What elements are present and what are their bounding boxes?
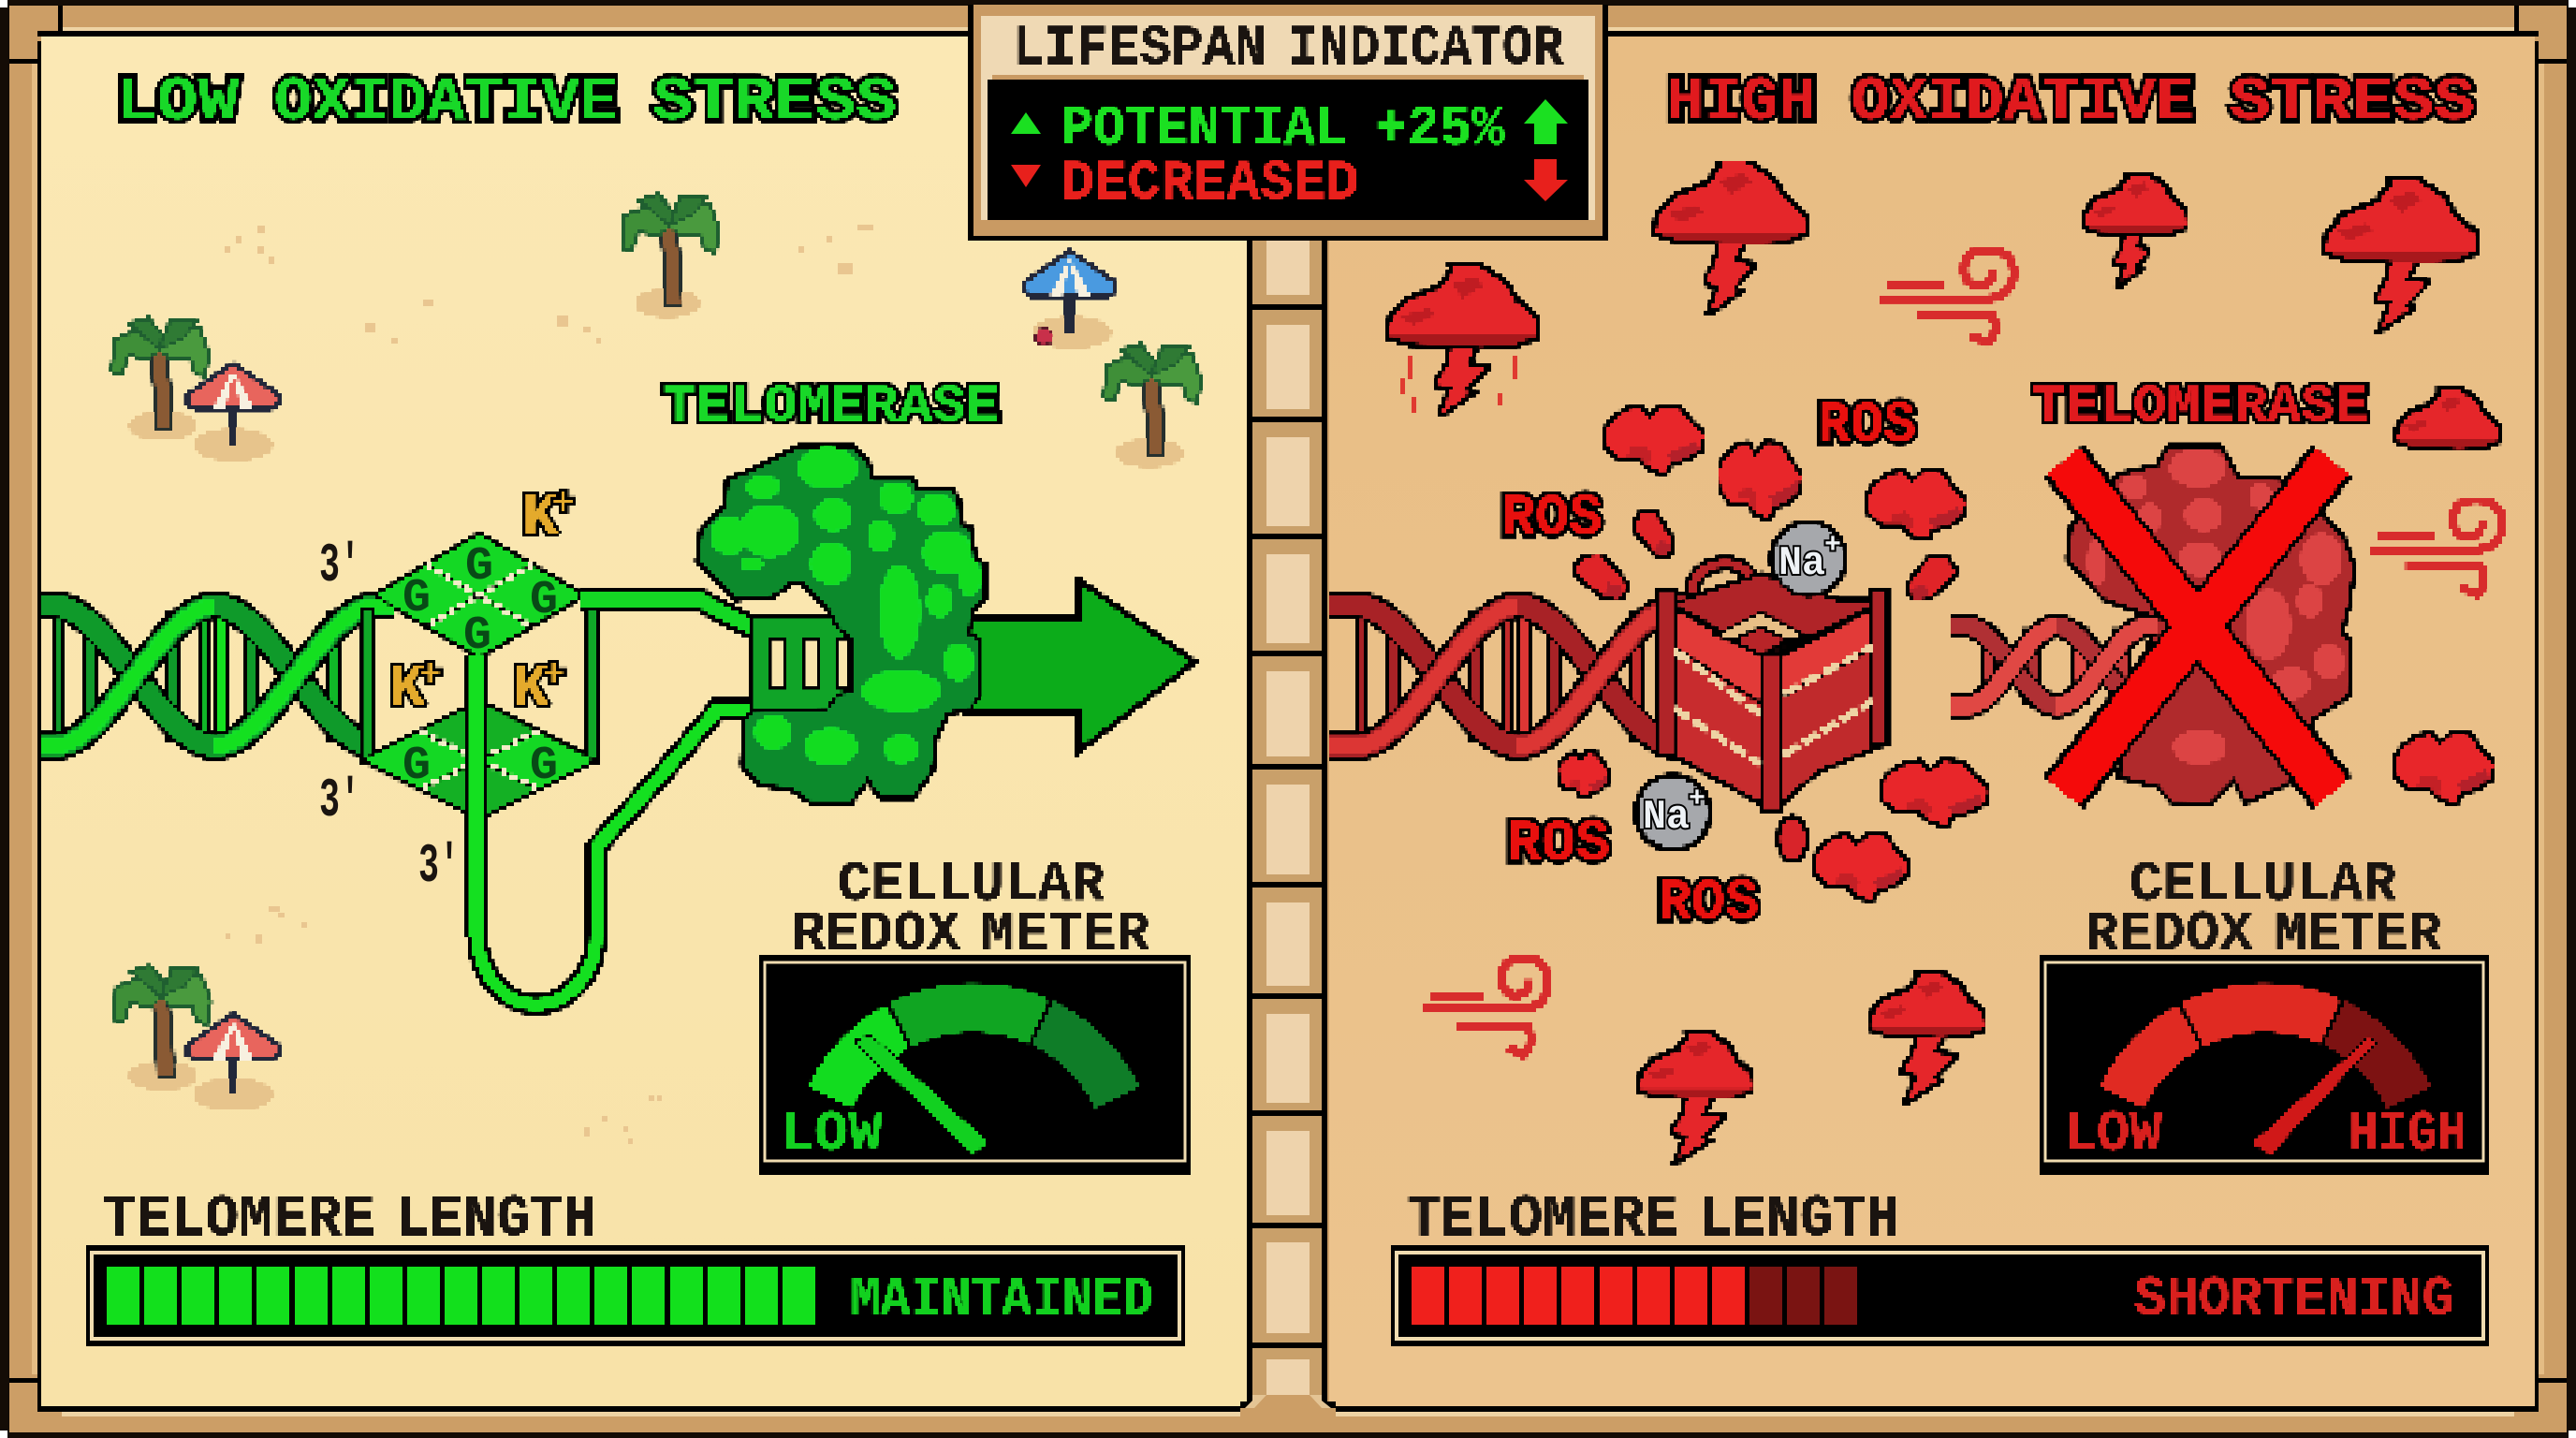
- heading: lifespan indicator: [1013, 18, 1563, 81]
- heading: lifespan indicator: INDICATOR: [1288, 18, 1563, 81]
- title: low oxidative stress: OXIDATIVE: [274, 67, 618, 138]
- potassium ions: K: [513, 656, 549, 724]
- gauge: high redox: LOW: [2064, 1101, 2163, 1167]
- ros labels: [1501, 392, 1916, 936]
- potassium ions: +: [552, 484, 574, 524]
- quadruplex connectors: [363, 609, 598, 763]
- red x: telomerase blocked: [2064, 462, 2332, 792]
- ros labels: ROS: [1501, 485, 1603, 551]
- gauge: high redox: [2040, 955, 2489, 1175]
- telomere length bar: maintained: [86, 1245, 1185, 1346]
- g-quadruplex top tetrad: [374, 534, 584, 657]
- telomerase inactive: [2068, 447, 2354, 803]
- cellular redox meter heading: CELLULAR: [838, 854, 1105, 917]
- title: high oxidative stress: OXIDATIVE: [1852, 67, 2194, 138]
- status: potential +25%: [1011, 98, 1568, 162]
- icon: storm cloud 6: [1867, 971, 1986, 1104]
- icon: small cloud: [2394, 387, 2500, 449]
- status: potential +25%: +25%: [1375, 98, 1505, 162]
- pixel scene: high stress: [1331, 160, 2502, 1164]
- telomere length bar: shortening: [1391, 1245, 2489, 1346]
- icon: wind 2: [2370, 500, 2502, 594]
- gauge: low redox: [759, 955, 1191, 1175]
- ros particles: [1558, 405, 2496, 902]
- title: low oxidative stress: [116, 67, 897, 138]
- cellular redox meter heading: [2085, 854, 2441, 967]
- title: low oxidative stress: STRESS: [652, 67, 897, 138]
- telomere length bar: shortening: SHORTENING: [2134, 1269, 2454, 1332]
- g bases: G: [402, 740, 431, 793]
- icon: storm cloud 2: [2082, 172, 2188, 288]
- title: high oxidative stress: HIGH: [1667, 67, 1816, 138]
- sodium ion bottom: [1636, 776, 1709, 849]
- panel: low oxidative stress: [28, 37, 1247, 1406]
- ros labels: ROS: [1818, 392, 1916, 459]
- potassium ions: K: [389, 656, 425, 724]
- sodium labels: +: [1689, 784, 1705, 815]
- fragmented dna: [1953, 626, 2157, 706]
- lifespan indicator panel: [968, 5, 1608, 241]
- cellular redox meter heading: METER: [981, 903, 1149, 967]
- 3 prime labels: 3': [319, 536, 360, 597]
- ros labels: ROS: [1658, 870, 1759, 936]
- cellular redox meter heading: REDOX: [792, 903, 960, 967]
- icon: palm tree bottom: [114, 966, 210, 1090]
- potassium ions: [389, 484, 574, 724]
- g bases: G: [530, 740, 558, 793]
- icon: storm cloud 3: [2322, 178, 2479, 332]
- icon: wind 1: [1880, 250, 2013, 343]
- status: potential +25%: POTENTIAL: [1061, 98, 1347, 162]
- icon: storm cloud 4 with rain: [1385, 264, 1540, 418]
- cellular redox meter heading: METER: [2274, 903, 2441, 967]
- g bases: [402, 540, 558, 793]
- telomere length bar: maintained: MAINTAINED: [850, 1269, 1153, 1332]
- gauge: high redox: HIGH: [2349, 1101, 2466, 1167]
- icon: palm tree top: [622, 195, 719, 317]
- gauge: low redox: LOW: [780, 1101, 884, 1167]
- icon: red umbrella lower: [188, 1015, 278, 1110]
- ros labels: ROS: [1507, 811, 1610, 877]
- sodium labels: +: [1824, 530, 1841, 562]
- label: telomerase: TELOMERASE: [2032, 376, 2368, 436]
- potassium ions: K: [522, 485, 558, 552]
- 3 prime labels: 3': [319, 771, 360, 832]
- arrow: telomere extension: [964, 580, 1193, 751]
- g bases: G: [465, 540, 493, 594]
- telomerase enzyme: [697, 447, 985, 802]
- center divider column: [1240, 234, 1336, 1417]
- panel: high oxidative stress: [1329, 37, 2535, 1406]
- title: low oxidative stress: LOW: [116, 67, 239, 138]
- label: telomerase: TELOMERASE: [663, 376, 1000, 436]
- sodium labels: Na: [1643, 794, 1690, 841]
- status: decreased: DECREASED: [1061, 153, 1359, 216]
- label: telomere length: [103, 1186, 597, 1253]
- pixel scene: low stress: [28, 195, 1200, 1110]
- sand specks: [225, 225, 873, 1144]
- icon: red umbrella: [188, 364, 278, 461]
- icon: blue umbrella with beach ball: [1025, 252, 1115, 348]
- title: high oxidative stress: [1667, 67, 2475, 138]
- g bases: G: [463, 609, 491, 663]
- label: telomere length: TELOMERE: [103, 1186, 375, 1253]
- icon: storm cloud 1: [1653, 160, 1808, 316]
- heading: lifespan indicator: LIFESPAN: [1013, 18, 1266, 81]
- 3 prime labels: [319, 536, 460, 898]
- dna rung block entering telomerase: [753, 618, 854, 710]
- sodium labels: [1643, 530, 1841, 841]
- icon: storm cloud 5: [1637, 1031, 1754, 1164]
- label: telomere length: [1407, 1186, 1900, 1253]
- cellular redox meter heading: REDOX: [2085, 903, 2253, 967]
- dna double helix damaged: [1331, 606, 1696, 746]
- dna double helix: [28, 606, 393, 746]
- title: high oxidative stress: STRESS: [2230, 67, 2475, 138]
- label: telomere length: TELOMERE: [1407, 1186, 1678, 1253]
- label: telomere length: LENGTH: [396, 1186, 597, 1253]
- dna loop strand: [464, 588, 750, 1016]
- potassium ions: +: [419, 655, 441, 696]
- g bases: G: [402, 572, 431, 625]
- icon: palm tree right: [1105, 345, 1200, 467]
- icon: palm tree left: [112, 318, 208, 440]
- cellular redox meter heading: CELLULAR: [2130, 854, 2396, 917]
- 3 prime labels: 3': [418, 837, 460, 898]
- label: telomere length: LENGTH: [1699, 1186, 1900, 1253]
- potassium ions: +: [543, 655, 564, 696]
- sodium labels: Na: [1778, 540, 1825, 587]
- status: decreased: [1011, 153, 1568, 216]
- icon: wind 3: [1424, 958, 1547, 1055]
- cellular redox meter heading: [792, 854, 1149, 967]
- damaged quadruplex crate: [1659, 564, 1887, 810]
- g bases: G: [530, 574, 558, 627]
- g-quadruplex bottom tetrad: [362, 701, 596, 818]
- sodium ion top: [1772, 522, 1845, 595]
